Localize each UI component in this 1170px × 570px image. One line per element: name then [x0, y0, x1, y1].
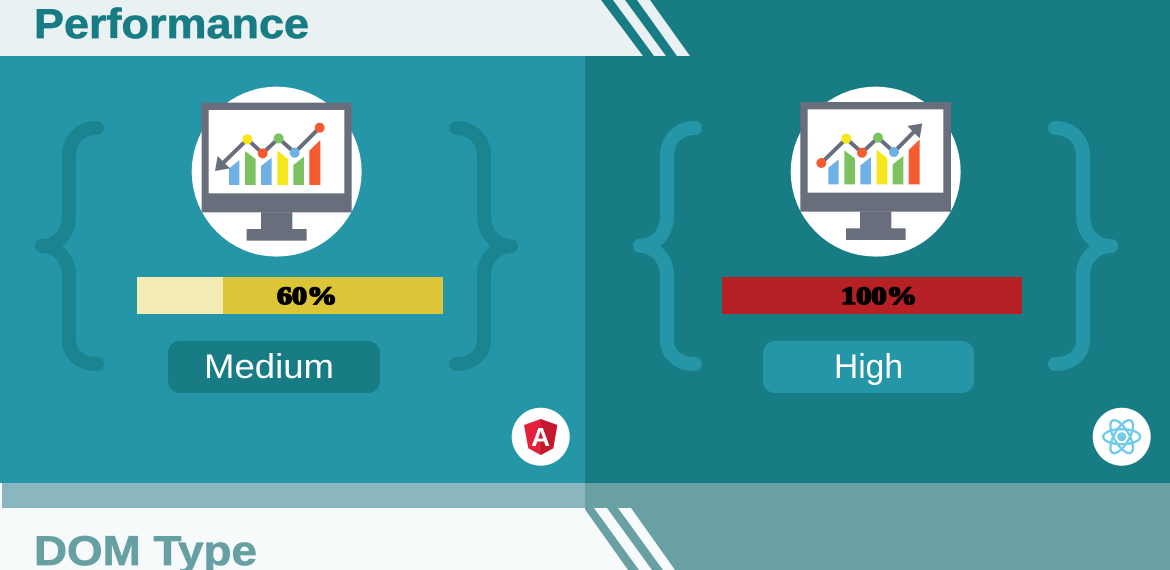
panel: React performance [585, 56, 1170, 483]
icon: monitor with falling chart [192, 87, 362, 257]
heading: Performance: Performance [34, 0, 309, 47]
header band: DOM Type [0, 508, 675, 570]
value: 60%: 60% [277, 283, 337, 310]
icon: monitor with rising chart [791, 87, 961, 257]
divider band [0, 483, 1170, 570]
progress bar: 100% [722, 277, 1022, 314]
icon: Angular logo: A [531, 422, 550, 452]
label pill: Medium: Medium [204, 348, 334, 386]
icon: React logo [1093, 408, 1151, 466]
label pill: Medium [168, 341, 380, 393]
icon: Angular logo [512, 408, 570, 466]
label pill: High: High [834, 348, 903, 386]
header band: Performance [0, 0, 690, 56]
left brace open, Angular panel [42, 128, 97, 364]
right brace close, Angular panel [456, 128, 511, 364]
progress bar: 60% [137, 277, 443, 314]
value: 100%: 100% [841, 283, 917, 310]
right brace close, React panel [1055, 128, 1111, 364]
label pill: High [763, 341, 974, 393]
panel: Angular performance [0, 56, 585, 483]
left brace open, React panel [640, 128, 695, 364]
